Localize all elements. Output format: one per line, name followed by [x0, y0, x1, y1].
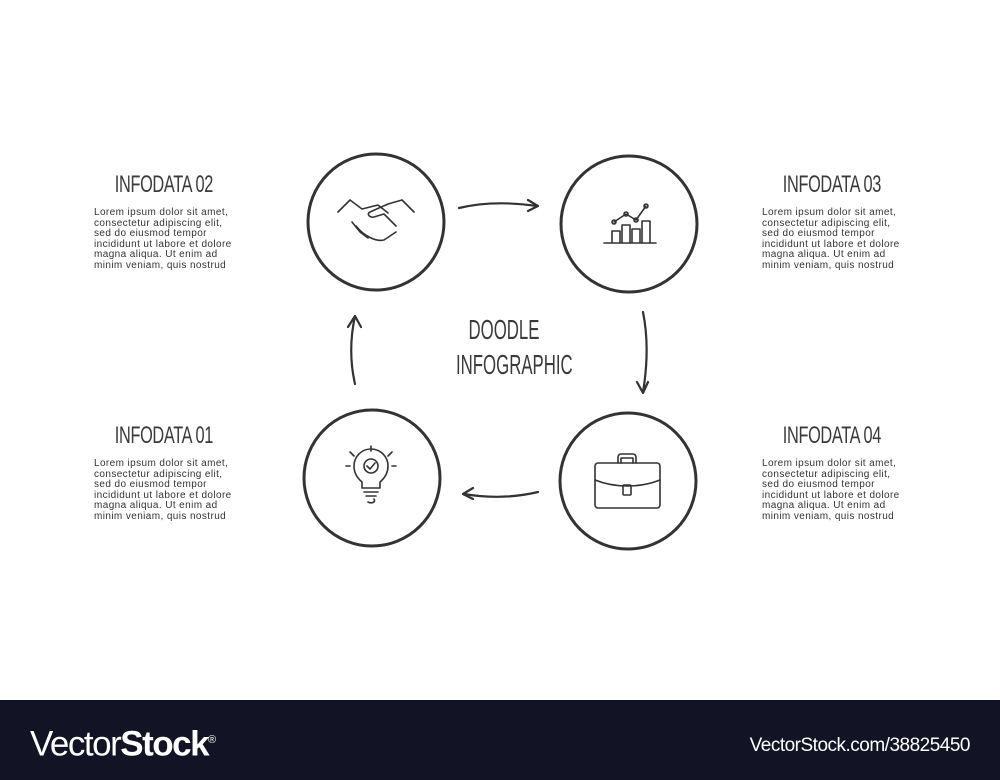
- footer bar: [0, 700, 1000, 780]
- block 04: incididunt ut labore et dolore: [762, 490, 900, 501]
- icon: bar chart: [604, 204, 656, 243]
- block 01: magna aliqua. Ut enim ad: [94, 500, 218, 511]
- center title: DOODLE: [469, 314, 539, 345]
- block 02: sed do eiusmod tempor: [94, 228, 207, 239]
- icon: briefcase: [595, 454, 660, 508]
- block 03: INFODATA 03: [783, 171, 881, 198]
- block 01: minim veniam, quis nostrud: [94, 511, 226, 522]
- footer logo: VectorStock®: [30, 725, 215, 764]
- icon: handshake: [338, 200, 414, 240]
- block 03: minim veniam, quis nostrud: [762, 260, 894, 271]
- circle 03 chart: [561, 156, 697, 292]
- block 03: consectetur adipiscing elit,: [762, 218, 890, 229]
- block 01: incididunt ut labore et dolore: [94, 490, 232, 501]
- circle 02 handshake: [308, 154, 444, 290]
- arrow top: [459, 200, 538, 211]
- block 03: sed do eiusmod tempor: [762, 228, 875, 239]
- block 02: magna aliqua. Ut enim ad: [94, 249, 218, 260]
- circle 01 lightbulb: [304, 410, 440, 546]
- footer url: VectorStock.com/38825450: [750, 735, 970, 756]
- icon: lightbulb: [346, 446, 396, 503]
- center title: INFOGRAPHIC: [456, 349, 573, 380]
- block 01: consectetur adipiscing elit,: [94, 469, 222, 480]
- block 04: minim veniam, quis nostrud: [762, 511, 894, 522]
- block 02: incididunt ut labore et dolore: [94, 239, 232, 250]
- block 03: incididunt ut labore et dolore: [762, 239, 900, 250]
- block 04: Lorem ipsum dolor sit amet,: [762, 458, 896, 469]
- block 02: minim veniam, quis nostrud: [94, 260, 226, 271]
- center title: [456, 314, 573, 380]
- block 04: consectetur adipiscing elit,: [762, 469, 890, 480]
- arrow left: [348, 316, 361, 384]
- block 03: magna aliqua. Ut enim ad: [762, 249, 886, 260]
- block 03: [762, 171, 900, 271]
- block 04: [762, 422, 900, 522]
- arrow right: [637, 312, 648, 393]
- block 01: sed do eiusmod tempor: [94, 479, 207, 490]
- block 04: INFODATA 04: [783, 422, 881, 449]
- block 01: INFODATA 01: [115, 422, 213, 449]
- block 04: sed do eiusmod tempor: [762, 479, 875, 490]
- block 01: [94, 422, 232, 522]
- block 03: Lorem ipsum dolor sit amet,: [762, 207, 896, 218]
- block 02: Lorem ipsum dolor sit amet,: [94, 207, 228, 218]
- arrow bottom: [463, 488, 538, 499]
- block 04: magna aliqua. Ut enim ad: [762, 500, 886, 511]
- block 02: consectetur adipiscing elit,: [94, 218, 222, 229]
- block 02: [94, 171, 232, 271]
- circle 04 briefcase: [560, 413, 696, 549]
- block 02: INFODATA 02: [115, 171, 213, 198]
- block 01: Lorem ipsum dolor sit amet,: [94, 458, 228, 469]
